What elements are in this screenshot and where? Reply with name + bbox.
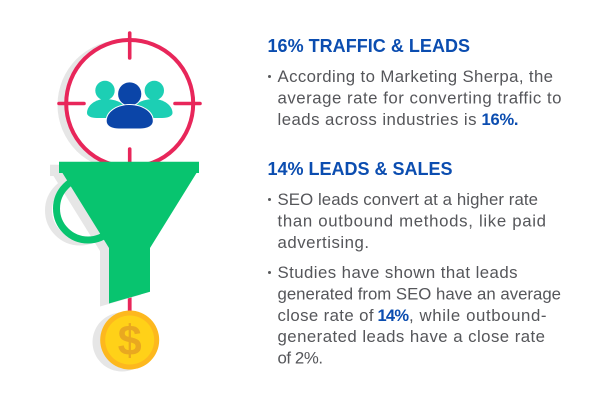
section: traffic and leads [268,36,562,129]
icon: left teal person [87,81,128,118]
icon: dollar coin [92,310,159,372]
bullet text: close rates: Studies have shown that leads [278,263,518,282]
bullet text: close rates: generated from SEO have an average [278,284,561,304]
bullet text: SEO leads convert [268,190,546,252]
icon: funnel [48,162,199,306]
bullet text: close rates [268,263,561,368]
pink connector line [128,296,132,314]
bullet text: Marketing Sherpa: According to Marketing Sherpa, the [278,67,553,86]
icon: right teal person [131,81,172,118]
icon: dollar coin: $ [118,317,142,365]
bullet text: close rates: of 2%. [278,348,323,368]
section: leads and sales [268,159,561,368]
bullet text: Marketing Sherpa: average rate for converting traffic to [278,88,562,108]
bullet text: close rates: generated leads have a close rate [278,327,545,346]
bullet text: Marketing Sherpa [268,67,562,129]
bullet text: close rates: close rate of [278,306,374,325]
bullet text: SEO leads convert: advertising. [278,233,369,252]
heading: 16% traffic and leads: 16% TRAFFIC & LEADS [268,36,470,56]
bullet text: SEO leads convert: SEO leads convert at a higher rate [278,190,538,209]
icon: centre blue person [107,82,153,128]
bullet text: close rates: 14% [378,307,409,325]
bullet text: Marketing Sherpa: 16%. [482,111,518,129]
heading: 14% leads and sales: 14% LEADS & SALES [268,159,452,179]
bullet text: SEO leads convert: than outbound methods, like paid [278,212,546,230]
bullet text: Marketing Sherpa: leads across industries is [278,110,476,129]
icon: target with audience [58,33,200,170]
bullet text: close rates: , while outbound- [409,306,546,325]
